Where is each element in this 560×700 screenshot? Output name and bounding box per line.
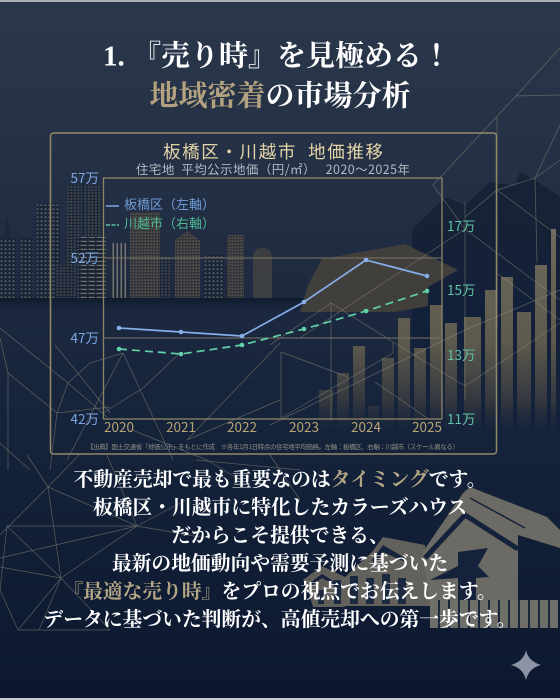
left axis labels: 47万 xyxy=(70,327,99,347)
left axis labels: 52万 xyxy=(70,247,99,267)
icon: sparkle xyxy=(511,650,541,680)
year labels: 2020 xyxy=(104,416,134,436)
fence xyxy=(430,600,558,628)
left axis labels: 42万 xyxy=(70,408,99,428)
year labels xyxy=(104,416,442,436)
castle silhouette xyxy=(412,172,560,445)
line: Itabashi xyxy=(117,258,429,338)
title xyxy=(103,40,451,112)
plot frame xyxy=(104,178,442,419)
legend: 板橋区（左軸） xyxy=(124,194,215,213)
left axis labels xyxy=(70,167,99,428)
chart title: 板橋区・川越市 地価推移 xyxy=(163,139,383,164)
castle stone wall xyxy=(300,244,458,312)
house illustration xyxy=(303,487,560,628)
right axis labels: 13万 xyxy=(447,344,476,364)
body text: だからこそ提供できる、 xyxy=(171,524,389,547)
year labels: 2024 xyxy=(351,416,381,436)
title: 1. 『売り時』を見極める！ xyxy=(103,40,451,72)
right axis labels: 17万 xyxy=(447,215,476,235)
right axis labels: 11万 xyxy=(447,408,476,428)
body text: 不動産売却で最も重要なのはタイミングです。 xyxy=(73,469,487,491)
chart panel xyxy=(50,133,496,454)
body text: 『最適な売り時』をプロの視点でお伝えします。 xyxy=(63,580,497,603)
source note: 【出典】国土交通省「地価公示」をもとに作成 ※各年1月1日時点の住宅地平均価格。左軸：板橋区、右軸：川越市（スケール異なる） xyxy=(87,441,459,451)
second house xyxy=(335,537,430,606)
year labels: 2022 xyxy=(227,416,257,436)
legend: 川越市（右軸） xyxy=(124,213,215,232)
top edge xyxy=(0,0,560,2)
body text xyxy=(43,469,517,631)
bottom edge xyxy=(0,698,560,700)
third house xyxy=(303,566,345,607)
skyline illustration xyxy=(0,183,272,300)
year labels: 2025 xyxy=(412,416,442,436)
main house xyxy=(422,487,560,600)
legend xyxy=(106,194,215,232)
body text: 板橋区・川越市に特化したカラーズハウス xyxy=(93,496,467,519)
right axis labels xyxy=(447,215,476,428)
grid lines xyxy=(103,258,442,338)
body text: データに基づいた判断が、高値売却への第一歩です。 xyxy=(43,608,517,631)
chart subtitle: 住宅地 平均公示地価（円/㎡） 2020～2025年 xyxy=(136,159,410,178)
title: 地域密着の市場分析 xyxy=(149,80,411,112)
skyline ground band xyxy=(0,298,310,315)
year labels: 2021 xyxy=(166,416,196,436)
body text: 最新の地価動向や需要予測に基づいた xyxy=(112,552,448,575)
rising bar graphic xyxy=(319,229,556,440)
year labels: 2023 xyxy=(289,416,319,436)
line: Kawagoe xyxy=(117,289,429,356)
left axis labels: 57万 xyxy=(70,167,99,187)
right axis labels: 15万 xyxy=(447,279,476,299)
